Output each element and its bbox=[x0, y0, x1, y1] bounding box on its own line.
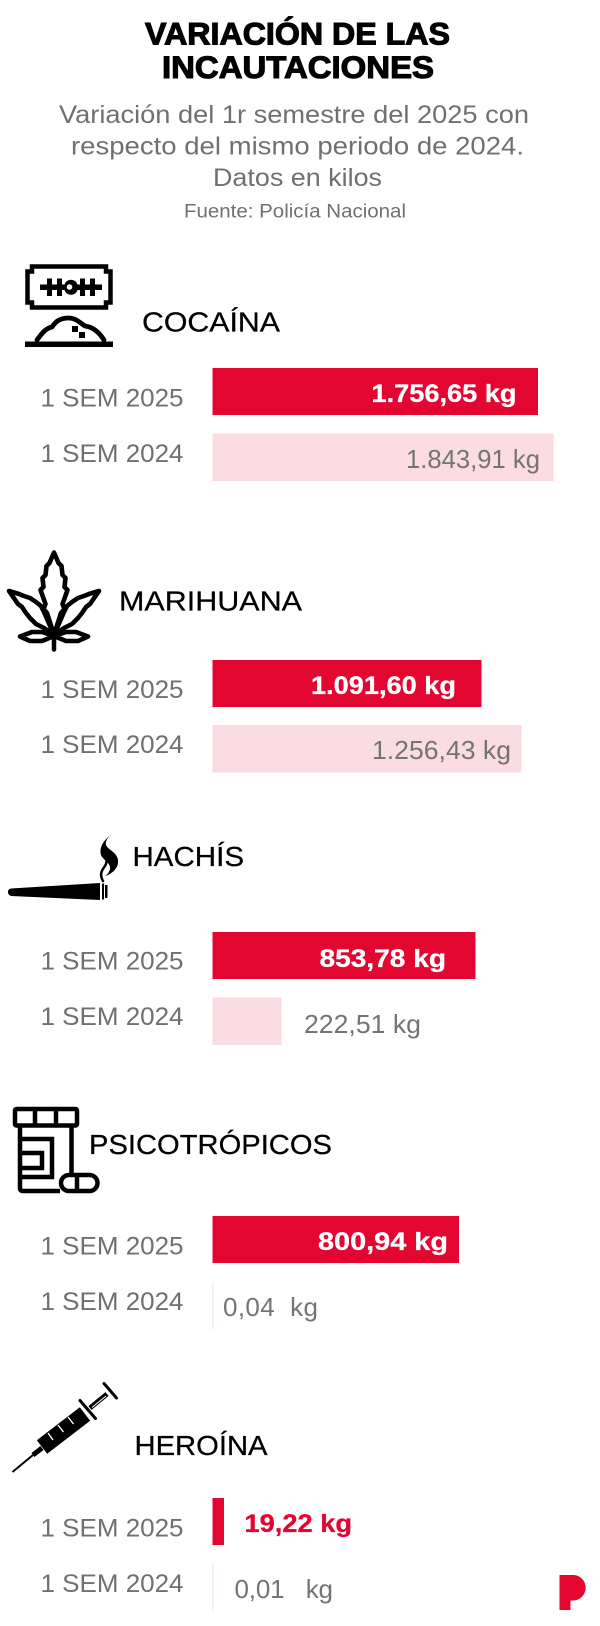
heading: psicotrópicos: PSICOTRÓPICOS bbox=[89, 1129, 332, 1160]
subtitle: Variación del 1r semestre del 2025 con bbox=[59, 101, 529, 129]
bar 2024 bbox=[212, 725, 522, 772]
row label 2024: 1 SEM 2024 bbox=[40, 1570, 184, 1598]
value 2024: 1.843,91 kg bbox=[406, 444, 540, 474]
bar 2025 bbox=[212, 932, 476, 979]
value 2025: 1.756,65 kg bbox=[372, 380, 516, 408]
value 2025: 853,78 kg bbox=[320, 945, 446, 973]
row label 2025: 1 SEM 2025 bbox=[40, 948, 184, 976]
panel: marihuana bbox=[9, 552, 522, 772]
subtitle bbox=[59, 101, 529, 192]
icon: pill bottle bbox=[15, 1109, 98, 1191]
subtitle: Datos en kilos bbox=[213, 164, 382, 192]
value 2024: 1.256,43 kg bbox=[372, 735, 511, 765]
bar 2025 bbox=[212, 660, 482, 707]
bar 2024 bbox=[212, 998, 282, 1045]
icon: publisher logo bbox=[560, 1575, 586, 1610]
title: INCAUTACIONES bbox=[162, 49, 434, 85]
row label 2024: 1 SEM 2024 bbox=[40, 1288, 184, 1316]
value 2024: 222,51 kg bbox=[304, 1009, 421, 1039]
row label 2024: 1 SEM 2024 bbox=[40, 440, 184, 468]
icon: razor blade and powder bbox=[25, 266, 113, 347]
bar 2025 bbox=[212, 368, 538, 415]
subtitle: respecto del mismo periodo de 2024. bbox=[71, 132, 524, 160]
panel: heroína bbox=[12, 1384, 352, 1610]
heading: marihuana: MARIHUANA bbox=[119, 586, 302, 617]
panel: cocaína bbox=[25, 266, 554, 481]
icon: joint with smoke bbox=[8, 834, 118, 900]
row label 2024: 1 SEM 2024 bbox=[40, 731, 184, 759]
icon: syringe bbox=[12, 1384, 116, 1472]
bar 2024 bbox=[212, 1282, 214, 1330]
icon: cannabis leaf bbox=[9, 552, 99, 650]
bar 2025 bbox=[212, 1216, 459, 1263]
row label 2025: 1 SEM 2025 bbox=[40, 1232, 184, 1260]
bar 2024 bbox=[212, 434, 554, 481]
row label 2024: 1 SEM 2024 bbox=[40, 1003, 184, 1031]
value 2024: 0,04 kg bbox=[223, 1292, 318, 1322]
source: Fuente: Policía Nacional bbox=[184, 202, 406, 222]
title: VARIACIÓN DE LAS bbox=[145, 16, 450, 52]
row label 2025: 1 SEM 2025 bbox=[40, 1514, 184, 1542]
value 2025: 19,22 kg bbox=[244, 1510, 352, 1538]
row label 2025: 1 SEM 2025 bbox=[40, 384, 184, 412]
row label 2025: 1 SEM 2025 bbox=[40, 676, 184, 704]
title bbox=[145, 16, 450, 85]
value 2024: 0,01 kg bbox=[234, 1574, 333, 1604]
bar 2024 bbox=[212, 1563, 214, 1610]
value 2025: 1.091,60 kg bbox=[311, 672, 456, 700]
value 2025: 800,94 kg bbox=[318, 1228, 448, 1256]
panel: psicotrópicos bbox=[15, 1109, 459, 1330]
panel: hachís bbox=[8, 834, 476, 1045]
heading: hachís: HACHÍS bbox=[132, 841, 244, 872]
bar 2025 bbox=[212, 1498, 224, 1545]
heading: cocaína: COCAÍNA bbox=[142, 306, 280, 338]
heading: heroína: HEROÍNA bbox=[134, 1430, 268, 1461]
